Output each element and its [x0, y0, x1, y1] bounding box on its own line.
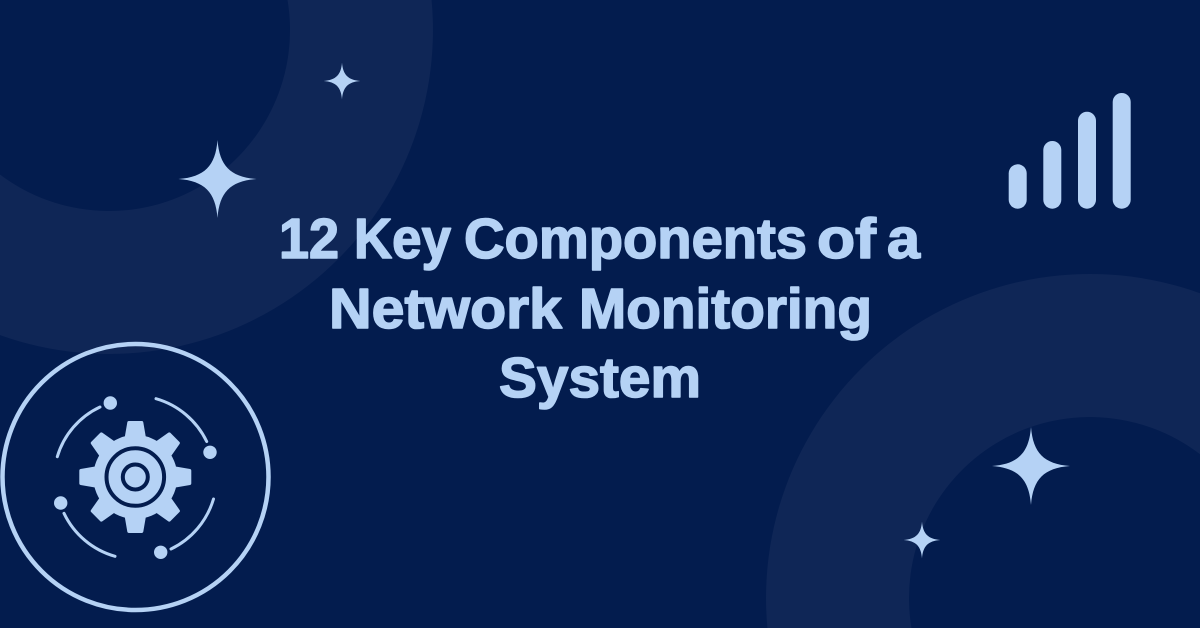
title: a	[887, 207, 921, 271]
icon: gear in circle	[2, 344, 268, 610]
gear	[81, 422, 190, 532]
orbit arcs	[57, 399, 213, 556]
icon: large sparkle top left	[178, 140, 256, 218]
title: Network	[329, 277, 562, 341]
title: Components	[464, 207, 807, 271]
title: System	[499, 346, 701, 410]
icon: small sparkle top	[324, 63, 360, 99]
decorative ring: top left	[0, 0, 433, 354]
icon: large sparkle bottom right	[992, 427, 1070, 505]
title	[279, 207, 921, 410]
icon: signal bars	[1009, 93, 1131, 209]
title: 12	[279, 207, 339, 271]
outer circle	[2, 344, 268, 610]
title: Monitoring	[579, 277, 872, 341]
icon: small sparkle bottom right	[904, 522, 940, 558]
title: Key	[354, 207, 451, 271]
title: of	[817, 207, 877, 271]
decorative ring: bottom right	[766, 274, 1200, 628]
orbit dots	[54, 396, 217, 559]
